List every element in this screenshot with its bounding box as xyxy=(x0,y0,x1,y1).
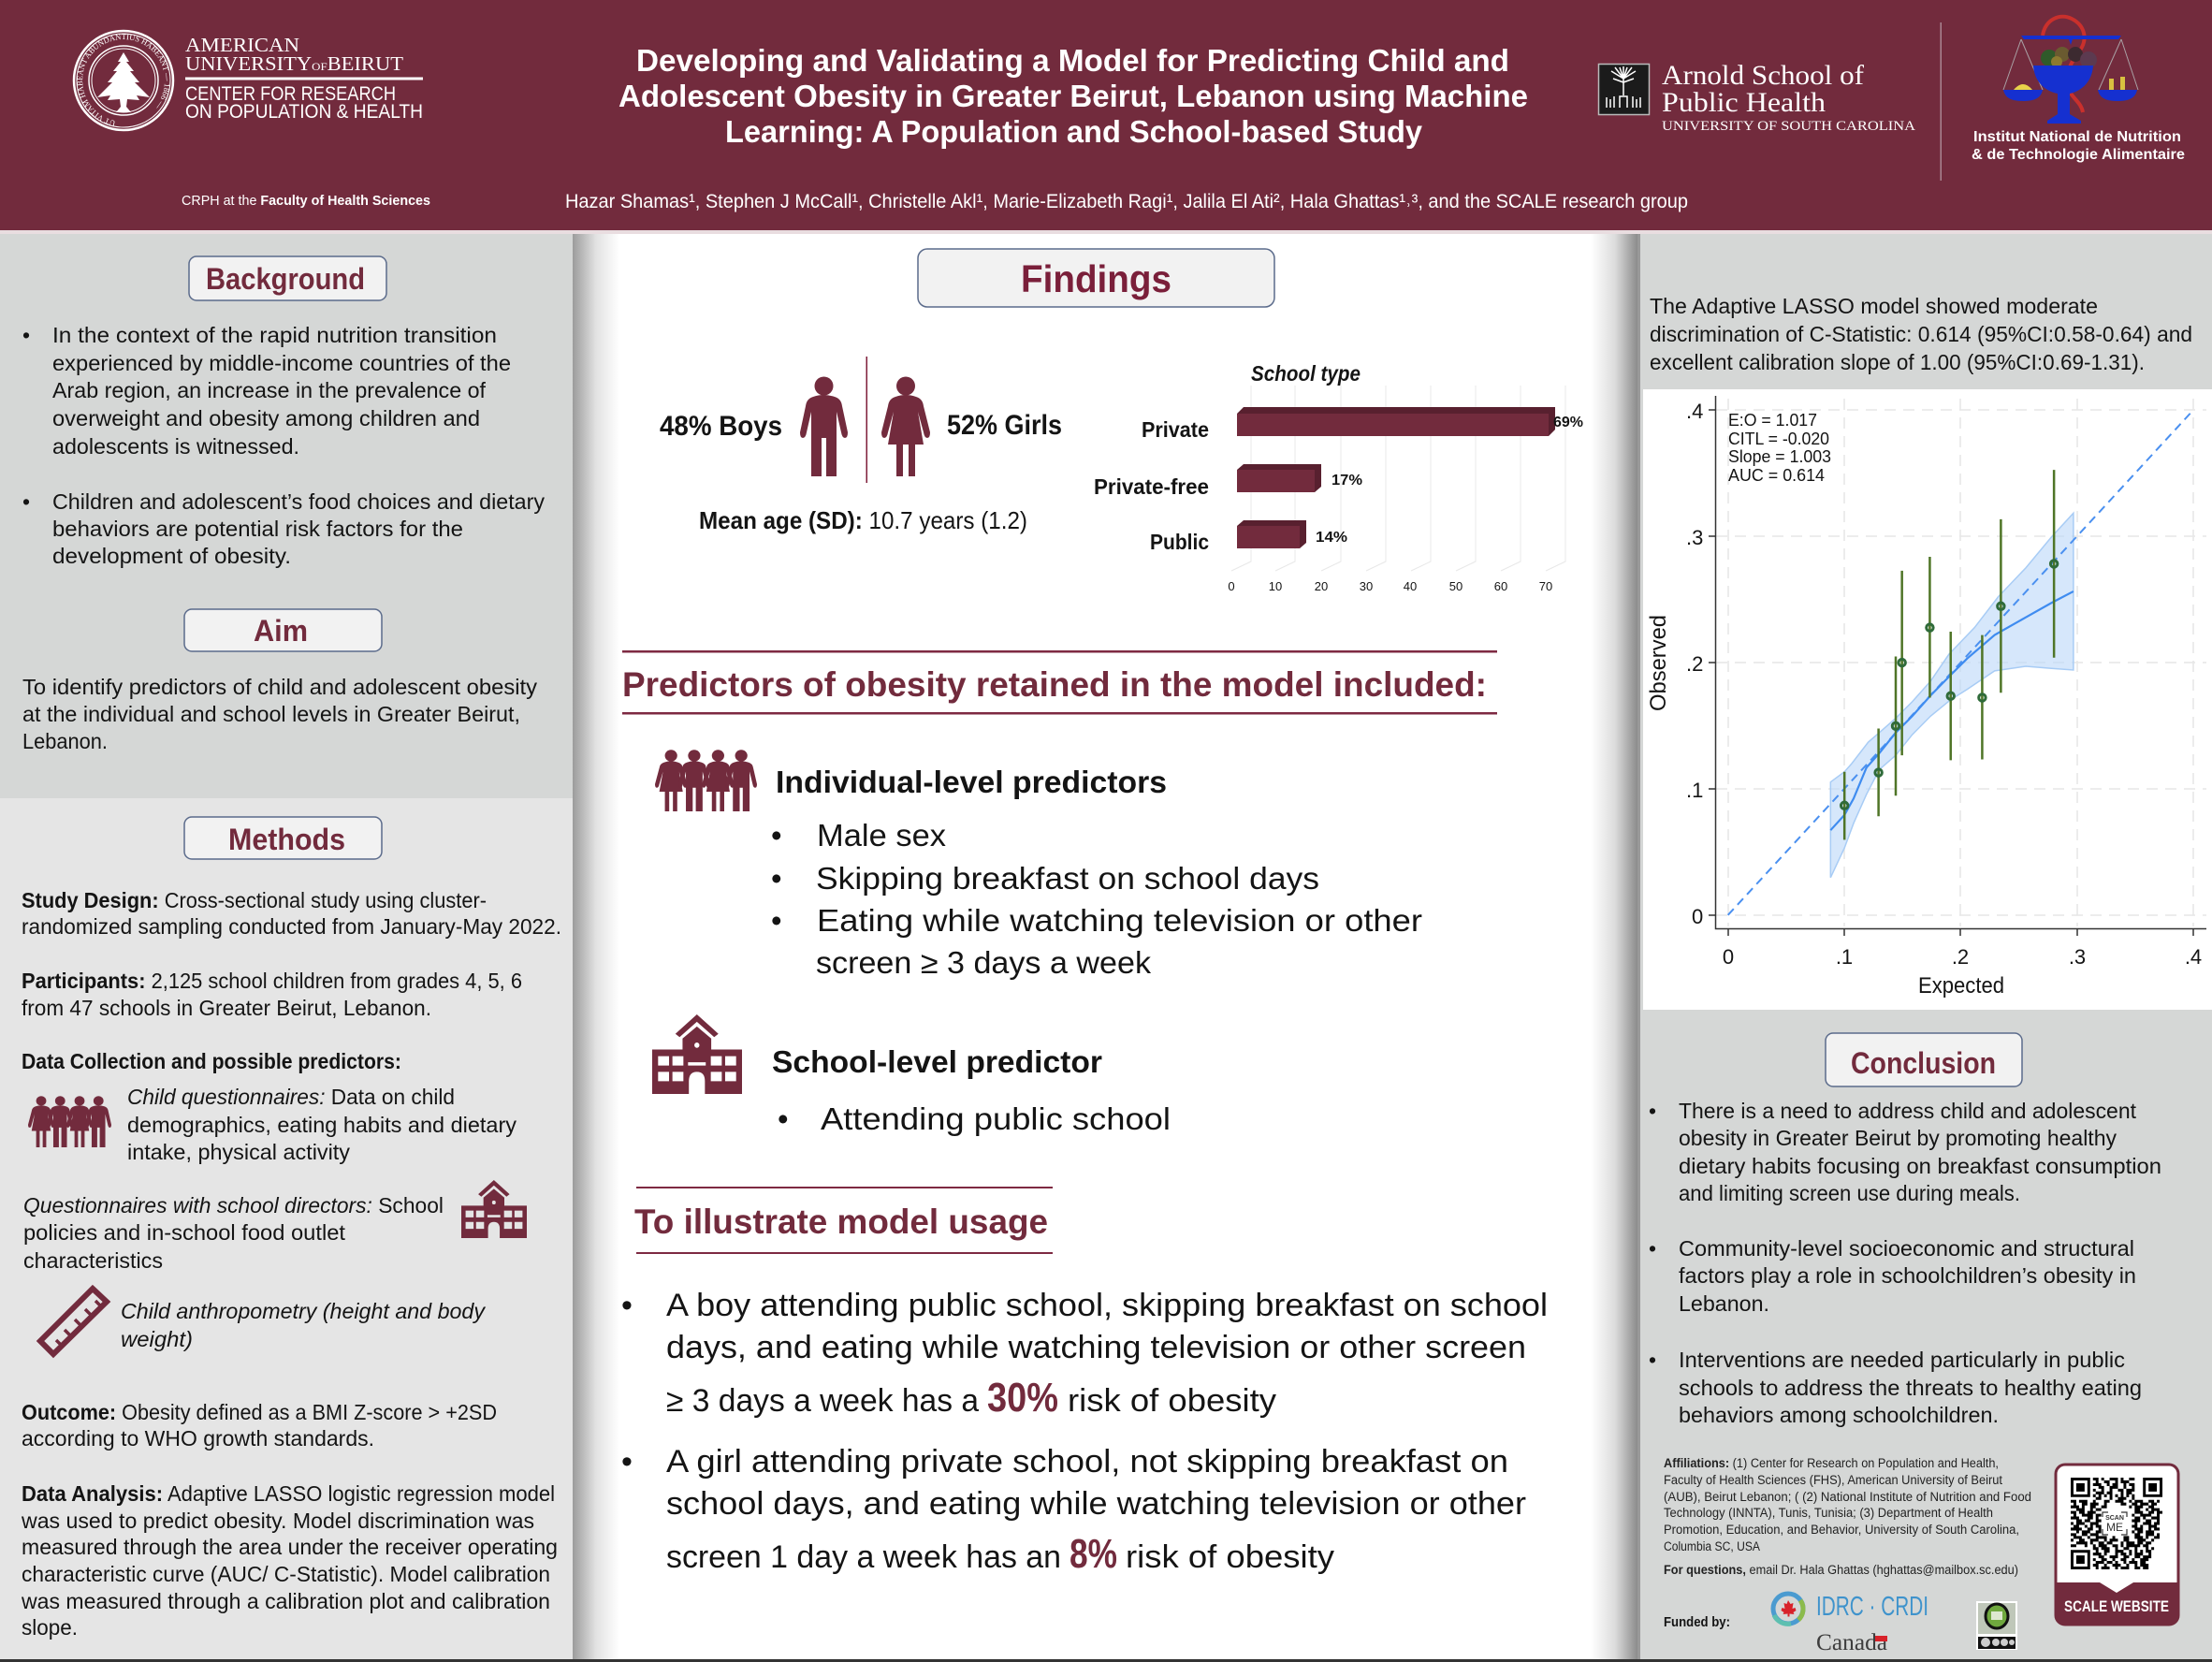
text: school-level predictor xyxy=(772,1044,1171,1136)
logo: Arnold School of Public Health: Arnold School of xyxy=(1662,60,1864,91)
axis title: observed: Observed xyxy=(1646,615,1671,711)
caption: CRPH at the Faculty of Health Sciences: CRPH at the Faculty of Health Sciences xyxy=(182,193,430,209)
bar: private 69% xyxy=(1237,407,1583,436)
text: conclusion bullets: • xyxy=(1649,1236,1656,1261)
logo: Arnold School of Public Health: Public Health xyxy=(1662,87,1826,118)
panel: header band xyxy=(0,0,2212,234)
text: data analysis: was used to predict obesity. Model discrimination was xyxy=(21,1509,534,1533)
text: background bullets: • xyxy=(22,323,30,347)
text: background bullets: • xyxy=(22,489,30,514)
text: conclusion bullets: factors play a role in schoolchildren’s obesity in xyxy=(1679,1263,2136,1288)
text: 48% boys: 48% Boys xyxy=(660,411,782,442)
axis tick labels: .2 xyxy=(1686,652,1703,676)
text: individual-level predictors: Individual-level predictors xyxy=(776,765,1167,799)
axis labels: 10 xyxy=(1269,579,1282,593)
heading: findings xyxy=(918,249,1274,307)
text: affiliations: Affiliations: (1) Center for Research on Population and Health, xyxy=(1664,1456,1999,1470)
text: outcome xyxy=(22,1400,497,1451)
text: conclusion bullets: Interventions are needed particularly in public xyxy=(1679,1348,2125,1372)
text: conclusion bullets xyxy=(1649,1099,2161,1427)
logo: American University of Beirut: AMERICAN xyxy=(185,34,299,56)
text: data analysis: characteristic curve (AUC/ C-Statistic). Model calibration xyxy=(22,1562,550,1586)
text: data analysis: measured through the area under the receiver operating xyxy=(22,1535,558,1559)
text: conclusion bullets: • xyxy=(1649,1348,1656,1372)
text: school director questionnaires: policies and in-school food outlet xyxy=(23,1220,346,1245)
heading: methods xyxy=(184,817,382,859)
text: individual-level predictors: Eating while watching television or other xyxy=(817,903,1422,938)
axis tick labels: 0 xyxy=(1723,945,1734,969)
text: boy example: risk of obesity xyxy=(1068,1383,1276,1419)
text: data analysis: slope. xyxy=(22,1615,78,1640)
text: girl example: screen 1 day a week has an xyxy=(666,1539,1061,1575)
qr code card: scale website xyxy=(2056,1465,2178,1625)
category labels: Private-free xyxy=(1094,474,1209,499)
heading: background: Background xyxy=(206,262,365,296)
text: boy example: ≥ 3 days a week has a xyxy=(666,1383,979,1419)
text: conclusion bullets: dietary habits focusing on breakfast consumption xyxy=(1679,1154,2161,1178)
text: model performance: excellent calibration slope of 1.00 (95%CI:0.69-1.31). xyxy=(1650,350,2145,374)
text: aim: To identify predictors of child and adolescent obesity xyxy=(22,675,538,699)
text: mean age: Mean age (SD): 10.7 years (1.2) xyxy=(699,506,1027,534)
heading: conclusion: Conclusion xyxy=(1851,1046,1996,1080)
icon: children xyxy=(28,1096,111,1147)
qr center: scan me: SCAN xyxy=(2105,1515,2124,1522)
bar: private-free 17% xyxy=(1237,464,1362,492)
text: study design: Study Design: Cross-sectional study using cluster- xyxy=(22,888,487,912)
text: background bullets xyxy=(22,323,545,568)
text: individual-level predictors: Skipping breakfast on school days xyxy=(816,861,1319,896)
authors: Hazar Shamas¹, Stephen J McCall¹, Christelle Akl¹, Marie-Elizabeth Ragi¹, Jalila El Ati², Hala Ghattas¹˒³, and the SCALE research group xyxy=(565,191,1688,212)
text: individual-level predictors: • xyxy=(771,818,782,853)
text: participants: Participants: 2,125 school children from grades 4, 5, 6 xyxy=(22,969,522,993)
text: boy example: • xyxy=(621,1288,633,1323)
text: aim xyxy=(22,675,538,753)
panel: methods xyxy=(0,798,573,1662)
text: background bullets: In the context of the rapid nutrition transition xyxy=(52,323,497,347)
logo: American University of Beirut: CENTER FOR RESEARCH xyxy=(185,83,396,105)
text: conclusion bullets: and limiting screen use during meals. xyxy=(1679,1181,2020,1205)
text: boy example: A boy attending public school, skipping breakfast on school xyxy=(666,1288,1548,1323)
text: data analysis xyxy=(21,1481,558,1640)
text: individual-level predictors xyxy=(771,765,1422,980)
text: child questionnaires: intake, physical activity xyxy=(127,1140,351,1164)
logo: American University of Beirut xyxy=(73,30,423,131)
logo: Institut National de Nutrition: Institut National de Nutrition xyxy=(1973,129,2181,145)
text: conclusion bullets: behaviors among schoolchildren. xyxy=(1679,1403,1999,1427)
text: background bullets: overweight and obesity among children and xyxy=(52,406,480,430)
heading: methods: Methods xyxy=(228,823,345,856)
icon: school xyxy=(652,1014,742,1094)
text: outcome: according to WHO growth standards. xyxy=(22,1426,374,1451)
icon: girl xyxy=(881,376,930,476)
text: data analysis: Data Analysis: Adaptive LASSO logistic regression model xyxy=(22,1481,555,1506)
title: Adolescent Obesity in Greater Beirut, Lebanon using Machine xyxy=(618,79,1528,113)
text: school-level predictor: Attending public school xyxy=(821,1101,1171,1136)
axis tick labels: .2 xyxy=(1952,945,1969,969)
logo: American University of Beirut: UT VITAM HABEANT ABUNDANTIUS HABEANT — 1866 — xyxy=(77,34,170,125)
axis tick labels: .4 xyxy=(2185,945,2202,969)
heading: aim: Aim xyxy=(254,614,308,648)
heading: findings: Findings xyxy=(1021,257,1171,300)
text: affiliations: Technology (INNTA), Tunis, Tunisia; (3) Department of Health xyxy=(1664,1506,1993,1520)
text: study design xyxy=(22,888,561,939)
text: participants xyxy=(22,969,522,1020)
heading: conclusion xyxy=(1826,1033,2022,1086)
text: affiliations xyxy=(1664,1456,2031,1577)
text: study design: randomized sampling conducted from January-May 2022. xyxy=(22,914,561,939)
qr center: scan me xyxy=(2103,1512,2127,1535)
title: Developing and Validating a Model for Predicting Child and xyxy=(636,43,1509,78)
text: conclusion bullets: • xyxy=(1649,1099,1656,1123)
bar: private-free 17%: 17% xyxy=(1332,473,1362,488)
text: conclusion bullets: Lebanon. xyxy=(1679,1291,1769,1316)
calibration statistics: Slope = 1.003 xyxy=(1728,447,1831,466)
text: boy example: days, and eating while watching television or other screen xyxy=(666,1330,1526,1365)
axis tick labels: .1 xyxy=(1836,945,1853,969)
axis labels: 20 xyxy=(1315,579,1328,593)
text: girl example: risk of obesity xyxy=(1126,1539,1334,1575)
text: girl example: A girl attending private school, not skipping breakfast on xyxy=(666,1444,1508,1480)
icon: children xyxy=(655,750,757,811)
bar: private 69%: 69% xyxy=(1553,415,1583,430)
fitted calibration curve xyxy=(1830,591,2074,830)
text: participants: from 47 schools in Greater Beirut, Lebanon. xyxy=(22,996,431,1020)
title xyxy=(618,43,1528,149)
logo: Arnold School of Public Health: UNIVERSITY OF SOUTH CAROLINA xyxy=(1662,119,1915,134)
logo: American University of Beirut: UNIVERSITY OFBEIRUT xyxy=(185,52,403,75)
axis tick labels: .3 xyxy=(2069,945,2086,969)
qr code card: scale website: SCALE WEBSITE xyxy=(2064,1598,2169,1615)
observed points with confidence intervals xyxy=(1841,470,2058,839)
axis labels: 0 xyxy=(1228,579,1235,593)
text: school director questionnaires: characteristics xyxy=(23,1248,163,1273)
heading: predictors of obesity: Predictors of obesity retained in the model included: xyxy=(622,665,1487,704)
qr pattern xyxy=(2071,1478,2162,1569)
axis labels: 50 xyxy=(1449,579,1463,593)
text: model performance: The Adaptive LASSO model showed moderate xyxy=(1650,294,2098,318)
logo: American University of Beirut: ON POPULATION & HEALTH xyxy=(185,101,423,123)
text: conclusion bullets: There is a need to address child and adolescent xyxy=(1679,1099,2137,1123)
icon: school xyxy=(461,1180,527,1238)
text: child questionnaires: Child questionnaires: Data on child xyxy=(127,1085,455,1109)
axis labels xyxy=(1228,579,1552,593)
bar chart: school type xyxy=(1094,361,1583,593)
text: background bullets: experienced by middle-income countries of the xyxy=(52,351,511,375)
bar: public 14% xyxy=(1237,520,1347,548)
text: individual-level predictors: Male sex xyxy=(817,818,947,853)
text: background bullets: behaviors are potential risk factors for the xyxy=(52,517,463,541)
reference diagonal xyxy=(1728,410,2193,915)
panel: background and aim xyxy=(0,234,573,798)
calibration statistics xyxy=(1728,411,1831,485)
icon: boy xyxy=(800,376,848,476)
text: school director questionnaires xyxy=(23,1193,444,1273)
category labels xyxy=(1094,417,1209,554)
chart: calibration plot xyxy=(1643,389,2212,1010)
text: boy example xyxy=(621,1288,1548,1421)
bar: public 14%: 14% xyxy=(1316,530,1347,546)
text: 52% girls: 52% Girls xyxy=(947,410,1062,441)
text: data analysis: was measured through a calibration plot and calibration xyxy=(21,1589,550,1613)
value: 30%: 30% xyxy=(987,1375,1058,1421)
icon: ruler xyxy=(40,1289,107,1354)
text: conclusion bullets: Community-level socioeconomic and structural xyxy=(1679,1236,2134,1261)
text: individual-level predictors: • xyxy=(771,861,782,896)
axis labels: 70 xyxy=(1539,579,1552,593)
text: background bullets: Arab region, an increase in the prevalence of xyxy=(52,378,487,402)
text: funded by: Funded by: xyxy=(1664,1615,1730,1630)
panel: results and conclusion xyxy=(1637,234,2212,1662)
text: child anthropometry xyxy=(121,1299,487,1351)
category labels: Public xyxy=(1150,530,1209,554)
heading: background xyxy=(189,256,386,300)
axis labels: 60 xyxy=(1494,579,1507,593)
category labels: Private xyxy=(1142,417,1209,442)
text: child questionnaires xyxy=(127,1085,517,1164)
calibration statistics: CITL = -0.020 xyxy=(1728,430,1829,448)
text: background bullets: Children and adolescent’s food choices and dietary xyxy=(52,489,545,514)
text: girl example: school days, and eating while watching television or other xyxy=(666,1486,1526,1522)
axis labels: 30 xyxy=(1360,579,1373,593)
text: child anthropometry: Child anthropometry (height and body xyxy=(121,1299,487,1323)
axis tick labels: .1 xyxy=(1686,779,1703,802)
text: affiliations: Faculty of Health Sciences (FHS), American University of Beirut xyxy=(1664,1473,2002,1487)
text: background bullets: adolescents is witnessed. xyxy=(52,434,299,459)
text: girl example xyxy=(621,1444,1526,1577)
chart title: School type xyxy=(1251,361,1361,386)
calibration statistics: AUC = 0.614 xyxy=(1728,466,1825,485)
title: Learning: A Population and School-based Study xyxy=(725,114,1423,149)
text: individual-level predictors: screen ≥ 3 days a week xyxy=(816,945,1152,980)
logo: IDRC CRDI Canada: Canada xyxy=(1816,1630,1887,1655)
heading: aim xyxy=(184,609,382,651)
text: affiliations: (AUB), Beirut Lebanon; ( (2) National Institute of Nutrition and Food xyxy=(1664,1490,2031,1504)
logo: Institut National de Nutrition: & de Technologie Alimentaire xyxy=(1972,147,2185,163)
text: outcome: Outcome: Obesity defined as a BMI Z-score > +2SD xyxy=(22,1400,497,1424)
confidence band xyxy=(1830,513,2074,878)
text: school director questionnaires: Questionnaires with school directors: School xyxy=(23,1193,444,1217)
text: child questionnaires: demographics, eating habits and dietary xyxy=(127,1113,517,1137)
axis tick labels: .4 xyxy=(1686,400,1703,423)
text: conclusion bullets: schools to address the threats to healthy eating xyxy=(1679,1376,2142,1400)
logo: Arnold School of Public Health xyxy=(1598,60,1915,134)
text: conclusion bullets: obesity in Greater Beirut by promoting healthy xyxy=(1679,1126,2117,1150)
axis labels: 40 xyxy=(1404,579,1417,593)
badge: creative commons xyxy=(1976,1601,2017,1650)
logo: Institut National de Nutrition xyxy=(1972,17,2185,163)
axis tick labels xyxy=(1686,400,2202,969)
text: school-level predictor: School-level predictor xyxy=(772,1044,1102,1079)
text: background bullets: development of obesity. xyxy=(52,544,291,568)
text: aim: Lebanon. xyxy=(22,729,108,753)
value: 8%: 8% xyxy=(1070,1531,1117,1577)
axis tick labels: .3 xyxy=(1686,526,1703,549)
text: model performance: discrimination of C-Statistic: 0.614 (95%CI:0.58-0.64) and xyxy=(1650,322,2192,346)
text: girl example: • xyxy=(621,1444,633,1480)
text: school-level predictor: • xyxy=(778,1101,789,1136)
text: data collection heading: Data Collection and possible predictors: xyxy=(22,1049,401,1073)
text: child anthropometry: weight) xyxy=(121,1327,193,1351)
logo: IDRC CRDI Canada: IDRC · CRDI xyxy=(1816,1592,1928,1622)
demographics: boys and girls xyxy=(660,357,1062,534)
calibration statistics: E:O = 1.017 xyxy=(1728,411,1817,430)
text: affiliations: For questions, email Dr. Hala Ghattas (hghattas@mailbox.sc.edu) xyxy=(1664,1563,2018,1577)
text: individual-level predictors: • xyxy=(771,903,782,938)
logo: IDRC CRDI Canada xyxy=(1773,1592,1928,1655)
axis title: expected: Expected xyxy=(1918,973,2004,999)
text: model performance xyxy=(1650,294,2192,374)
qr center: scan me: ME xyxy=(2106,1521,2123,1534)
text: aim: at the individual and school levels in Greater Beirut, xyxy=(22,702,520,726)
text: affiliations: Promotion, Education, and Behavior, University of South Carolina, xyxy=(1664,1523,2019,1537)
axis tick labels: 0 xyxy=(1692,905,1703,928)
text: affiliations: Columbia SC, USA xyxy=(1664,1539,1760,1553)
heading: to illustrate model usage: To illustrate model usage xyxy=(634,1203,1048,1241)
